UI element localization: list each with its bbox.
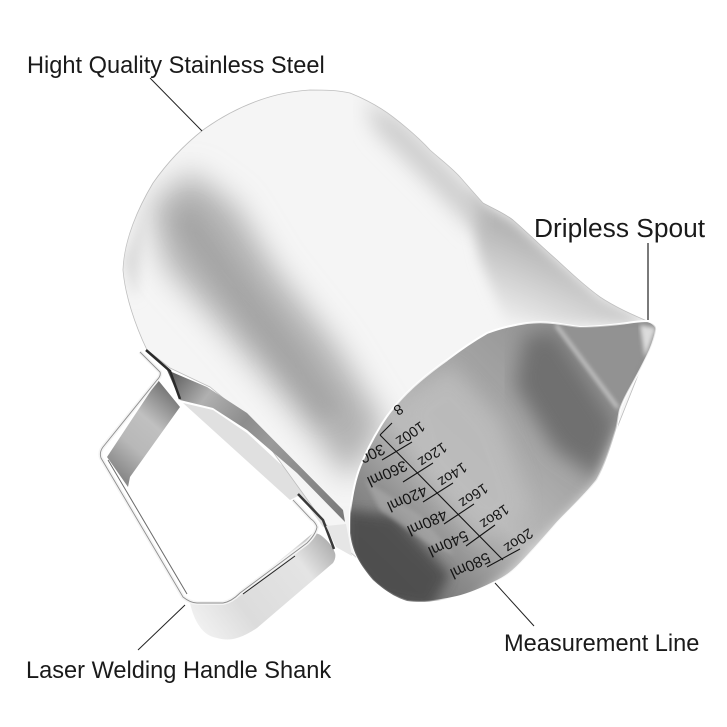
callout: dripless spout: Dripless Spout — [534, 213, 706, 243]
callout: measurement line — [495, 583, 699, 657]
interior: lighter scale zone — [400, 365, 530, 540]
callout: handle shank: Laser Welding Handle Shank — [26, 658, 331, 684]
shading: left edge — [123, 227, 144, 288]
oz labels: 16oz — [456, 479, 490, 511]
oz labels: 20oz — [501, 524, 535, 556]
pitcher interior — [345, 321, 656, 610]
interior: dark upper wall — [515, 330, 618, 478]
interior: spout wall — [558, 326, 656, 408]
handle: dark strap along body — [167, 370, 345, 522]
scale: main line — [380, 435, 503, 560]
oz labels: 18oz — [477, 500, 511, 532]
handle — [100, 352, 343, 640]
callout: stainless steel — [27, 53, 325, 131]
handle: inner band along body — [183, 403, 343, 527]
callout: handle shank — [26, 605, 331, 684]
oz labels — [390, 400, 535, 556]
interior: spout ridge — [556, 325, 618, 408]
oz labels: 8 — [390, 400, 406, 418]
ml labels: 420ml — [384, 481, 430, 515]
oz labels: 14oz — [435, 458, 469, 490]
shading: core of dark band — [180, 216, 331, 416]
callout: stainless steel: Hight Quality Stainless Steel — [27, 53, 325, 79]
measurement scale — [356, 400, 535, 582]
ml labels: 540ml — [425, 526, 471, 560]
handle: lower weld tab — [298, 494, 334, 549]
callout: measurement line: Measurement Line — [504, 631, 699, 657]
interior: bright lower edge — [478, 425, 616, 588]
pitcher body — [123, 90, 656, 601]
shading: spout side — [465, 190, 647, 325]
ml labels: 580ml — [447, 548, 493, 582]
body shading — [122, 100, 647, 480]
ml labels: 480ml — [404, 505, 450, 539]
body neck below strap — [326, 524, 352, 556]
oz labels: 12oz — [415, 438, 449, 470]
ml labels — [362, 444, 490, 580]
ml labels: 300 — [356, 440, 387, 466]
handle: outer wire edge — [100, 352, 317, 603]
handle: lower strap — [190, 533, 335, 640]
oz labels: 100z — [393, 417, 427, 449]
interior: spout lip highlight — [640, 325, 656, 358]
handle: weld tab — [146, 350, 180, 399]
interior: pale arc — [368, 484, 450, 552]
shading: upper right band — [365, 100, 482, 235]
scale: tick marks — [380, 423, 520, 567]
ml labels: 360ml — [364, 456, 410, 490]
shading: centre dark band — [150, 172, 385, 480]
handle: upper strap — [107, 380, 180, 487]
interior: dark left bottom — [345, 510, 450, 610]
